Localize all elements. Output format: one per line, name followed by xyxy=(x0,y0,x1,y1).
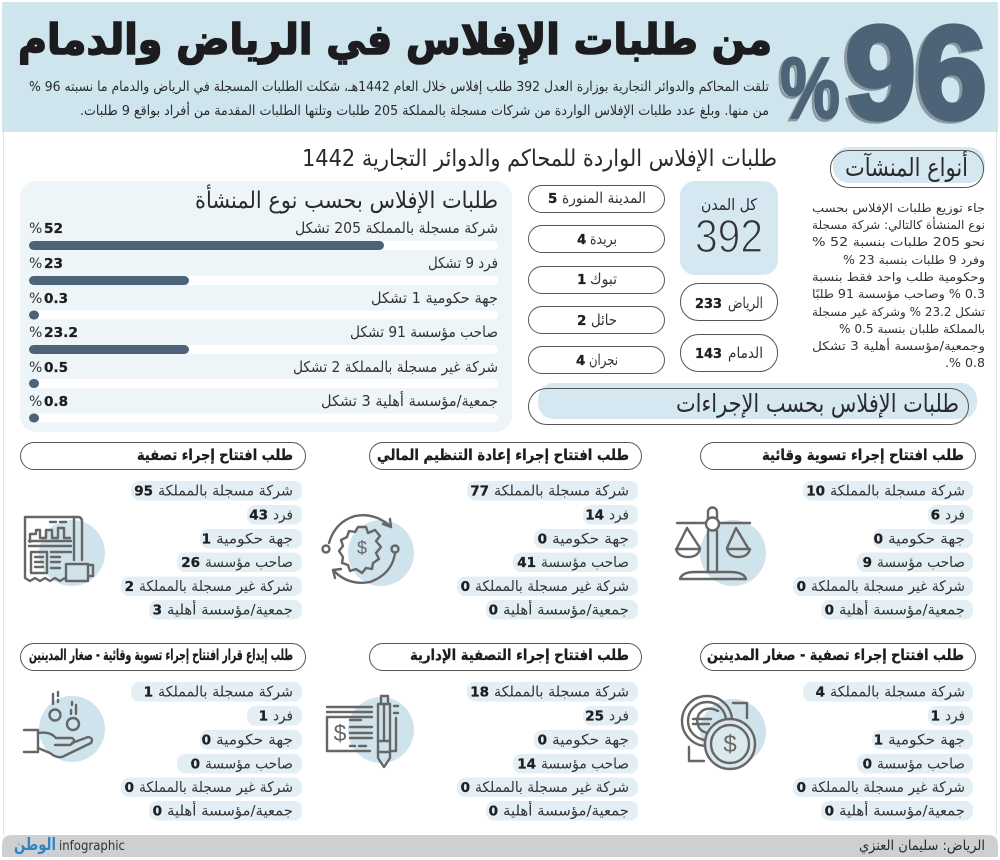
values list: 18 xyxy=(470,684,489,700)
values list: صاحب مؤسسة xyxy=(541,756,629,772)
header banner xyxy=(2,0,998,148)
values list: 2 xyxy=(125,579,134,595)
credit: الرياض: سليمان العنزي xyxy=(859,838,985,854)
main title: من طلبات الإفلاس في الرياض والدمام xyxy=(18,15,772,65)
values list: 0 xyxy=(489,602,498,618)
chart title: طلبات الإفلاس بحسب نوع المنشأة xyxy=(195,184,498,214)
values list: صاحب مؤسسة xyxy=(205,555,293,571)
big number 96 percent: % xyxy=(778,43,838,139)
values list: شركة مسجلة بالمملكة xyxy=(494,684,629,700)
values list: 4 xyxy=(816,684,825,700)
values list: 1 xyxy=(144,684,153,700)
panel heading xyxy=(20,442,306,470)
panel heading xyxy=(700,644,976,670)
icon: newspaper and mug xyxy=(25,517,105,586)
description text: جاء توزيع طلبات الإفلاس بحسب xyxy=(812,201,985,216)
panel: liquidation xyxy=(20,442,306,620)
city: Tabuk: تبوك xyxy=(590,270,617,288)
icon: gear with dollar and cycle arrows xyxy=(322,515,414,586)
icon: gear with dollar and cycle arrows: $ xyxy=(357,538,367,558)
city: Hail xyxy=(528,306,664,334)
values list: 6 xyxy=(931,508,940,524)
panel heading: طلب افتتاح إجراء تسوية وقائية xyxy=(762,446,964,464)
values list: جمعية/مؤسسة أهلية xyxy=(167,800,293,820)
bar row: association 0.8 xyxy=(29,391,498,422)
bar row: government 0.3 xyxy=(29,289,498,320)
bar row: government 0.3: % xyxy=(29,291,42,307)
values list: شركة مسجلة بالمملكة xyxy=(830,484,965,500)
bar row: registered company 52: % xyxy=(29,221,42,237)
bar row: sole proprietor 23.2 xyxy=(29,323,498,354)
panel heading: طلب افتتاح إجراء تصفية - صغار المدينين xyxy=(707,646,964,664)
values list: فرد xyxy=(945,508,965,524)
bar row: registered company 52: شركة مسجلة بالمملكة 205 تشكل xyxy=(295,219,498,237)
values list: جمعية/مؤسسة أهلية xyxy=(503,800,629,820)
bar row: association 0.8: % xyxy=(29,394,42,410)
values list xyxy=(121,481,302,620)
bar row: government 0.3: جهة حكومية 1 تشكل xyxy=(371,289,498,307)
city: Hail: 2 xyxy=(577,313,586,329)
values list: صاحب مؤسسة xyxy=(541,555,629,571)
bar row: unregistered company 0.5: 0.5 xyxy=(44,360,68,376)
values list: شركة غير مسجلة بالمملكة xyxy=(475,780,629,796)
description text: نحو 205 طلبات بنسبة 52 % xyxy=(812,235,985,250)
description text xyxy=(812,201,985,370)
bar row: individual 23: فرد 9 تشكل xyxy=(428,254,498,272)
city: Buraidah: 4 xyxy=(577,232,586,248)
values list: شركة مسجلة بالمملكة xyxy=(830,684,965,700)
bar row: sole proprietor 23.2: % xyxy=(29,325,42,341)
panel heading: طلب افتتاح إجراء إعادة التنظيم المالي xyxy=(377,446,629,464)
intro paragraph: من منها. وبلغ عدد طلبات الإفلاس الواردة من شركات مسجلة بالمملكة 205 طلبات وتلتها الطلبات المقدمة من أفراد بواقع 9 طلبات. xyxy=(80,101,769,119)
total cities card: كل المدن xyxy=(701,195,757,214)
city: Tabuk: 1 xyxy=(577,272,586,288)
values list: شركة غير مسجلة بالمملكة xyxy=(139,579,293,595)
values list: 0 xyxy=(461,579,470,595)
values list: 26 xyxy=(181,555,200,571)
values list: 0 xyxy=(489,804,498,820)
city: Najran: 4 xyxy=(576,353,585,369)
panel heading xyxy=(370,644,642,670)
values list: فرد xyxy=(609,508,629,524)
values list: شركة غير مسجلة بالمملكة xyxy=(475,579,629,595)
bar row: individual 23 xyxy=(29,254,498,285)
city: Buraidah: بريدة xyxy=(590,230,617,248)
section heading: courts requests: طلبات الإفلاس الواردة للمحاكم والدوائر التجارية 1442 xyxy=(302,146,777,172)
icon: cheque and pen: $ xyxy=(334,720,347,746)
description text: وحكومية طلب واحد فقط بنسبة xyxy=(812,270,985,285)
description text: نوع المنشأة كالتالي: شركة مسجلة xyxy=(812,216,985,233)
description text: وفرد 9 طلبات بنسبة 23 % xyxy=(843,253,985,268)
values list: صاحب مؤسسة xyxy=(205,756,293,772)
values list: جهة حكومية xyxy=(216,532,293,548)
values list: شركة غير مسجلة بالمملكة xyxy=(811,579,965,595)
city: Buraidah xyxy=(528,226,664,252)
city: Dammam: 143 xyxy=(695,346,722,362)
description text: تشكل 23.2 % وشركة غير مسجلة xyxy=(812,305,985,320)
panel: liquidation for small debtors xyxy=(682,644,976,820)
values list: 0 xyxy=(461,780,470,796)
description text: 0.3 % وصاحب مؤسسة 91 طلبًا xyxy=(812,287,985,302)
city: Najran: نجران xyxy=(589,351,618,369)
bar row: government 0.3: 0.3 xyxy=(44,291,68,307)
bar row: unregistered company 0.5: % xyxy=(29,360,42,376)
bar row: individual 23: % xyxy=(29,256,42,272)
section heading pill: requests by procedure xyxy=(528,383,977,424)
values list: فرد xyxy=(609,708,629,724)
city: Riyadh: الرياض xyxy=(728,294,763,312)
values list: 0 xyxy=(797,579,806,595)
logo: infographic xyxy=(59,839,125,854)
bar row: individual 23: 23 xyxy=(44,256,63,272)
values list: شركة مسجلة بالمملكة xyxy=(158,484,293,500)
total cities card xyxy=(680,181,778,275)
bar row: registered company 52: 52 xyxy=(44,221,63,237)
values list: 0 xyxy=(153,804,162,820)
city: Dammam: الدمام xyxy=(728,344,763,362)
values list: جمعية/مؤسسة أهلية xyxy=(839,800,965,820)
footer bar xyxy=(2,835,998,857)
values list: 14 xyxy=(585,508,604,524)
big number 96 percent: 96 xyxy=(845,0,987,146)
values list: جهة حكومية xyxy=(888,532,965,548)
big number 96 percent xyxy=(778,0,987,148)
logo xyxy=(14,835,125,855)
values list: صاحب مؤسسة xyxy=(877,756,965,772)
values list xyxy=(793,481,973,620)
values list: 0 xyxy=(191,756,200,772)
icon: balance scale xyxy=(676,508,766,586)
icon: coins xyxy=(682,696,766,769)
values list: فرد xyxy=(273,508,293,524)
values list: شركة غير مسجلة بالمملكة xyxy=(811,780,965,796)
values list: 0 xyxy=(874,532,883,548)
values list: جهة حكومية xyxy=(552,532,629,548)
values list xyxy=(457,481,638,620)
city: Riyadh: 233 xyxy=(695,296,722,312)
values list: 25 xyxy=(585,708,604,724)
values list: 10 xyxy=(806,484,825,500)
values list: 77 xyxy=(470,484,489,500)
values list: صاحب مؤسسة xyxy=(877,555,965,571)
total cities card: 392 xyxy=(695,210,763,262)
values list: 0 xyxy=(825,602,834,618)
values list: جهة حكومية xyxy=(888,732,965,748)
values list: 41 xyxy=(517,555,536,571)
bar row: association 0.8: جمعية/مؤسسة أهلية 3 تشكل xyxy=(321,391,498,410)
values list: 1 xyxy=(874,732,883,748)
values list: فرد xyxy=(273,708,293,724)
values list: 0 xyxy=(863,756,872,772)
bar row: unregistered company 0.5 xyxy=(29,358,498,388)
city: Najran xyxy=(528,346,664,374)
panel heading: طلب افتتاح إجراء التصفية الإدارية xyxy=(410,646,629,664)
values list: 3 xyxy=(153,602,162,618)
description text: بالمملكة طلبان بنسبة 0.5 % xyxy=(839,322,985,336)
bar row: association 0.8: 0.8 xyxy=(44,394,68,410)
values list: 0 xyxy=(825,804,834,820)
bar row: sole proprietor 23.2: 23.2 xyxy=(44,325,78,341)
values list: 0 xyxy=(125,780,134,796)
values list: شركة غير مسجلة بالمملكة xyxy=(139,780,293,796)
panel heading xyxy=(700,442,976,470)
values list: 43 xyxy=(249,508,268,524)
values list: 1 xyxy=(931,708,940,724)
bar row: unregistered company 0.5: شركة غير مسجلة بالمملكة 2 تشكل xyxy=(293,358,498,376)
values list: 1 xyxy=(202,532,211,548)
city: Dammam xyxy=(680,334,778,372)
description text: وجمعية/مؤسسة أهلية 3 تشكل xyxy=(812,338,985,354)
icon: coins: $ xyxy=(723,731,737,758)
description text: 0.8 %. xyxy=(945,356,985,370)
bar row: sole proprietor 23.2: صاحب مؤسسة 91 تشكل xyxy=(350,323,498,341)
panel: requests by establishment type chart xyxy=(20,181,512,432)
values list: 0 xyxy=(797,780,806,796)
big number 96 percent: 96 xyxy=(842,1,984,148)
city: Hail: حائل xyxy=(591,311,617,329)
values list: جمعية/مؤسسة أهلية xyxy=(503,600,629,618)
panel: preventive settlement xyxy=(676,442,976,620)
city: Tabuk xyxy=(528,266,664,294)
values list: 0 xyxy=(538,532,547,548)
values list: 0 xyxy=(202,732,211,748)
bar row: registered company 52 xyxy=(29,219,498,250)
heading pill: أنواع المنشآت xyxy=(845,150,968,182)
big number 96 percent: % xyxy=(780,41,840,137)
logo: الوطن xyxy=(14,835,56,855)
panel heading xyxy=(20,644,306,670)
city: Madinah xyxy=(528,186,664,212)
intro paragraph: تلقت المحاكم والدوائر التجارية بوزارة العدل 392 طلب إفلاس خلال العام 1442هـ، شكلت الطلبات المسجلة في الرياض والدمام ما نسبته 96 % xyxy=(29,79,769,95)
values list: 1 xyxy=(259,708,268,724)
values list: جهة حكومية xyxy=(552,732,629,748)
icon: cheque and pen xyxy=(327,696,414,767)
values list: جمعية/مؤسسة أهلية xyxy=(839,600,965,618)
panel heading: طلب افتتاح إجراء تصفية xyxy=(137,446,293,464)
intro paragraph xyxy=(29,79,769,119)
values list xyxy=(457,682,638,820)
values list xyxy=(121,682,302,820)
values list: شركة مسجلة بالمملكة xyxy=(494,484,629,500)
values list: شركة مسجلة بالمملكة xyxy=(158,684,293,700)
values list: 9 xyxy=(863,555,872,571)
values list: 14 xyxy=(517,756,536,772)
panel: establishment types xyxy=(812,147,985,370)
panel heading xyxy=(370,442,642,470)
heading pill xyxy=(830,147,985,188)
icon: hand with falling coins xyxy=(24,692,105,762)
city: Riyadh xyxy=(680,284,778,320)
panel: administrative liquidation xyxy=(327,644,642,820)
values list: فرد xyxy=(945,708,965,724)
city: Madinah: 5 xyxy=(548,191,557,207)
values list: جهة حكومية xyxy=(216,732,293,748)
city: Madinah: المدينة المنورة xyxy=(562,189,646,207)
values list: جمعية/مؤسسة أهلية xyxy=(167,600,293,618)
panel: filing decision to open settlement for small debtors xyxy=(20,644,306,820)
panel: financial reorganization xyxy=(322,442,642,620)
panel heading: طلب إيداع قرار افتتاح إجراء تسوية وقائية - صغار المدينين xyxy=(29,646,293,664)
values list: 0 xyxy=(538,732,547,748)
values list xyxy=(793,682,973,820)
values list: 95 xyxy=(134,484,153,500)
